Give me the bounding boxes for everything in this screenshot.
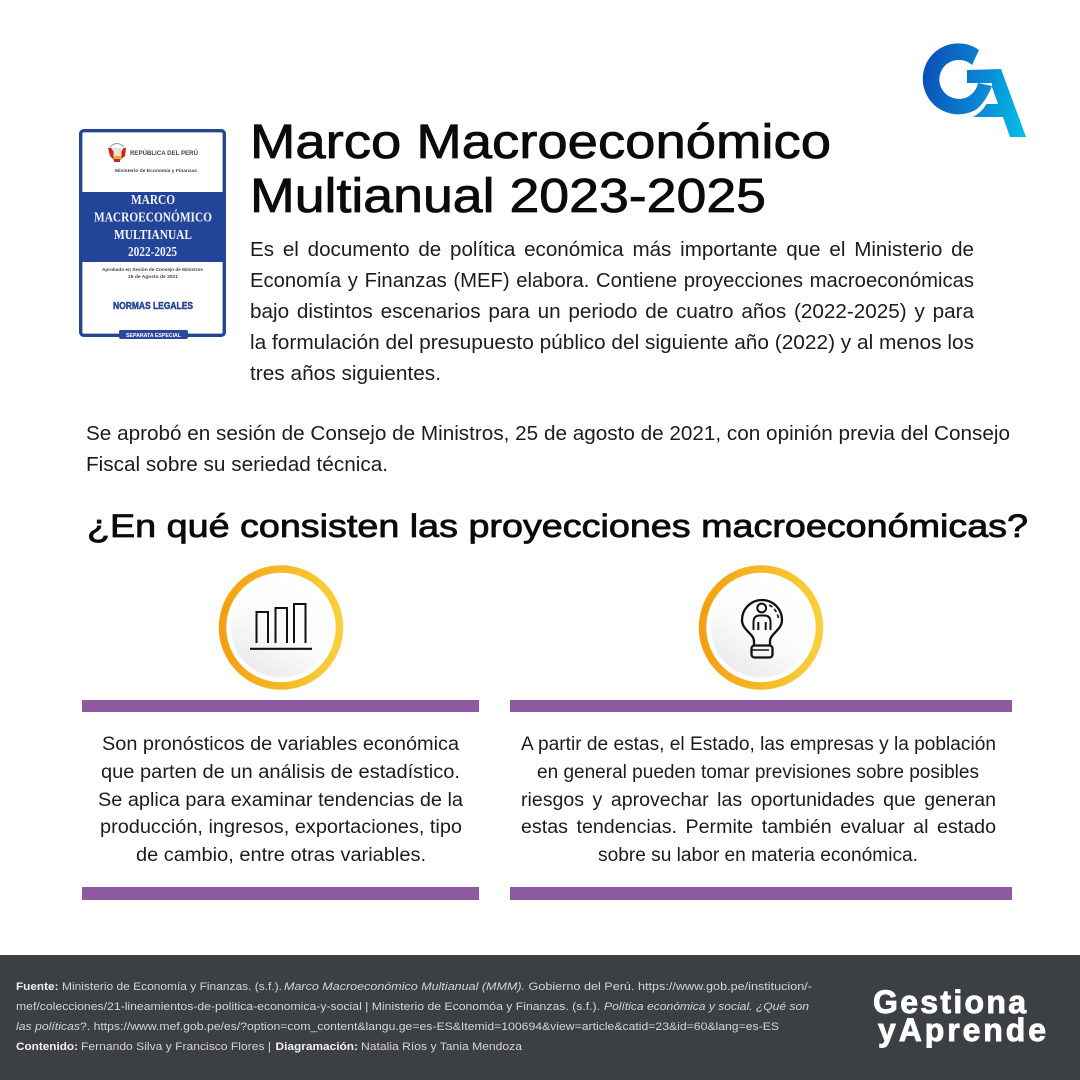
intro paragraph: Economía y Finanzas (MEF) elabora. Contiene proyecciones macroeconómicas: [250, 270, 974, 292]
right column text: sobre su labor en materia económica.: [598, 845, 918, 866]
title: Marco Macroeconómico: [250, 116, 831, 169]
approval paragraph: Fiscal sobre su seriedad técnica.: [86, 454, 388, 476]
right column text: estas tendencias. Permite también evaluar al estado: [521, 817, 996, 838]
cover: separata tab: SEPARATA ESPECIAL: [126, 333, 182, 339]
approval paragraph: Se aprobó en sesión de Consejo de Ministros, 25 de agosto de 2021, con opinión previa del Consejo: [86, 423, 1010, 445]
panel: left column: [82, 700, 479, 900]
footer credits: Política económica y social. ¿Qué son: [604, 1001, 809, 1013]
left column text: que parten de un análisis de estadístico.: [101, 762, 460, 783]
footer credits: mef/colecciones/21-lineamientos-de-politica-economica-y-social | Ministerio de Economóa y Finanzas. (s.f.).: [16, 1001, 600, 1013]
footer credits: Marco Macroeconómico Multianual (MMM).: [284, 981, 525, 993]
cover: blue band with title: [82, 192, 223, 262]
right column text: riesgos y aprovechar las oportunidades que generan: [521, 790, 996, 811]
intro paragraph: [250, 239, 975, 385]
footer credits: Gobierno del Perú. https://www.gob.pe/institucion/-: [528, 981, 812, 993]
footer band: [0, 955, 1080, 1080]
cover: approval note: [102, 267, 204, 279]
footer credits: [16, 981, 812, 1053]
footer credits: Diagramación:: [276, 1041, 358, 1053]
cover: ministry text: Ministerio de Economía y Finanzas: [115, 168, 197, 174]
panel: right column: [510, 700, 1012, 900]
right column text: A partir de estas, el Estado, las empresas y la población: [521, 734, 996, 755]
left column text: Son pronósticos de variables económica: [102, 734, 459, 755]
section heading: ¿En qué consisten las proyecciones macroeconómicas?: [87, 508, 1028, 544]
right column text: en general pueden tomar previsiones sobre posibles: [537, 762, 979, 783]
brand wordmark: Gestiona: [873, 984, 1026, 1020]
intro paragraph: bajo distintos escenarios para un periodo de cuatro años (2022-2025) y para: [250, 301, 975, 323]
icon: bar chart in ring: [222, 569, 340, 686]
footer credits: las políticas: [16, 1021, 81, 1033]
footer credits: ?. https://www.mef.gob.pe/es/?option=com_content&langu.ge=es-ES&Itemid=100694&view=article&catid=23&id=60&lang=es-ES: [80, 1021, 779, 1033]
right bottom bar: [510, 887, 1012, 900]
footer credits: Ministerio de Economía y Finanzas. (s.f.).: [62, 981, 282, 993]
left column text: Se aplica para examinar tendencias de la: [98, 790, 463, 811]
book cover image: [81, 131, 224, 339]
left column text: [98, 734, 463, 866]
right column text: [521, 734, 996, 866]
left column text: producción, ingresos, exportaciones, tipo: [100, 817, 462, 838]
footer credits: Fuente:: [16, 981, 58, 993]
cover: blue band with title: MULTIANUAL: [114, 227, 192, 242]
cover: blue band with title: MARCO: [131, 192, 175, 207]
intro paragraph: tres años siguientes.: [250, 363, 441, 385]
intro paragraph: Es el documento de política económica más importante que el Ministerio de: [250, 239, 974, 261]
cover: Peruvian emblem: [108, 144, 126, 162]
cover: approval note: Aprobado en Sesión de Consejo de Ministros: [102, 267, 204, 272]
cover: blue band with title: 2022-2025: [128, 244, 177, 259]
footer credits: Fernando Silva y Francisco Flores |: [81, 1041, 271, 1053]
brand wordmark: yAprende: [878, 1012, 1046, 1048]
cover: header text: REPÚBLICA DEL PERÚ: [130, 148, 198, 157]
footer credits: Natalia Ríos y Tania Mendoza: [361, 1041, 523, 1053]
cover: separata tab: [119, 330, 188, 339]
left bottom bar: [82, 887, 479, 900]
cover: normas legales: NORMAS LEGALES: [113, 301, 193, 312]
brand wordmark: [873, 984, 1046, 1048]
title: [250, 116, 831, 223]
intro paragraph: la formulación del presupuesto público del siguiente año (2022) y al menos los: [250, 332, 974, 354]
title: Multianual 2023-2025: [250, 170, 766, 223]
cover: blue band with title: MACROECONÓMICO: [94, 210, 212, 224]
left top bar: [82, 700, 479, 712]
left column text: de cambio, entre otras variables.: [136, 845, 426, 866]
approval paragraph: [86, 423, 1010, 476]
footer credits: Contenido:: [16, 1041, 78, 1053]
right top bar: [510, 700, 1012, 712]
icon: light bulb with person in ring: [702, 569, 820, 686]
logo: GA: [923, 43, 1026, 137]
cover: approval note: 25 de Agosto de 2021: [128, 274, 179, 279]
